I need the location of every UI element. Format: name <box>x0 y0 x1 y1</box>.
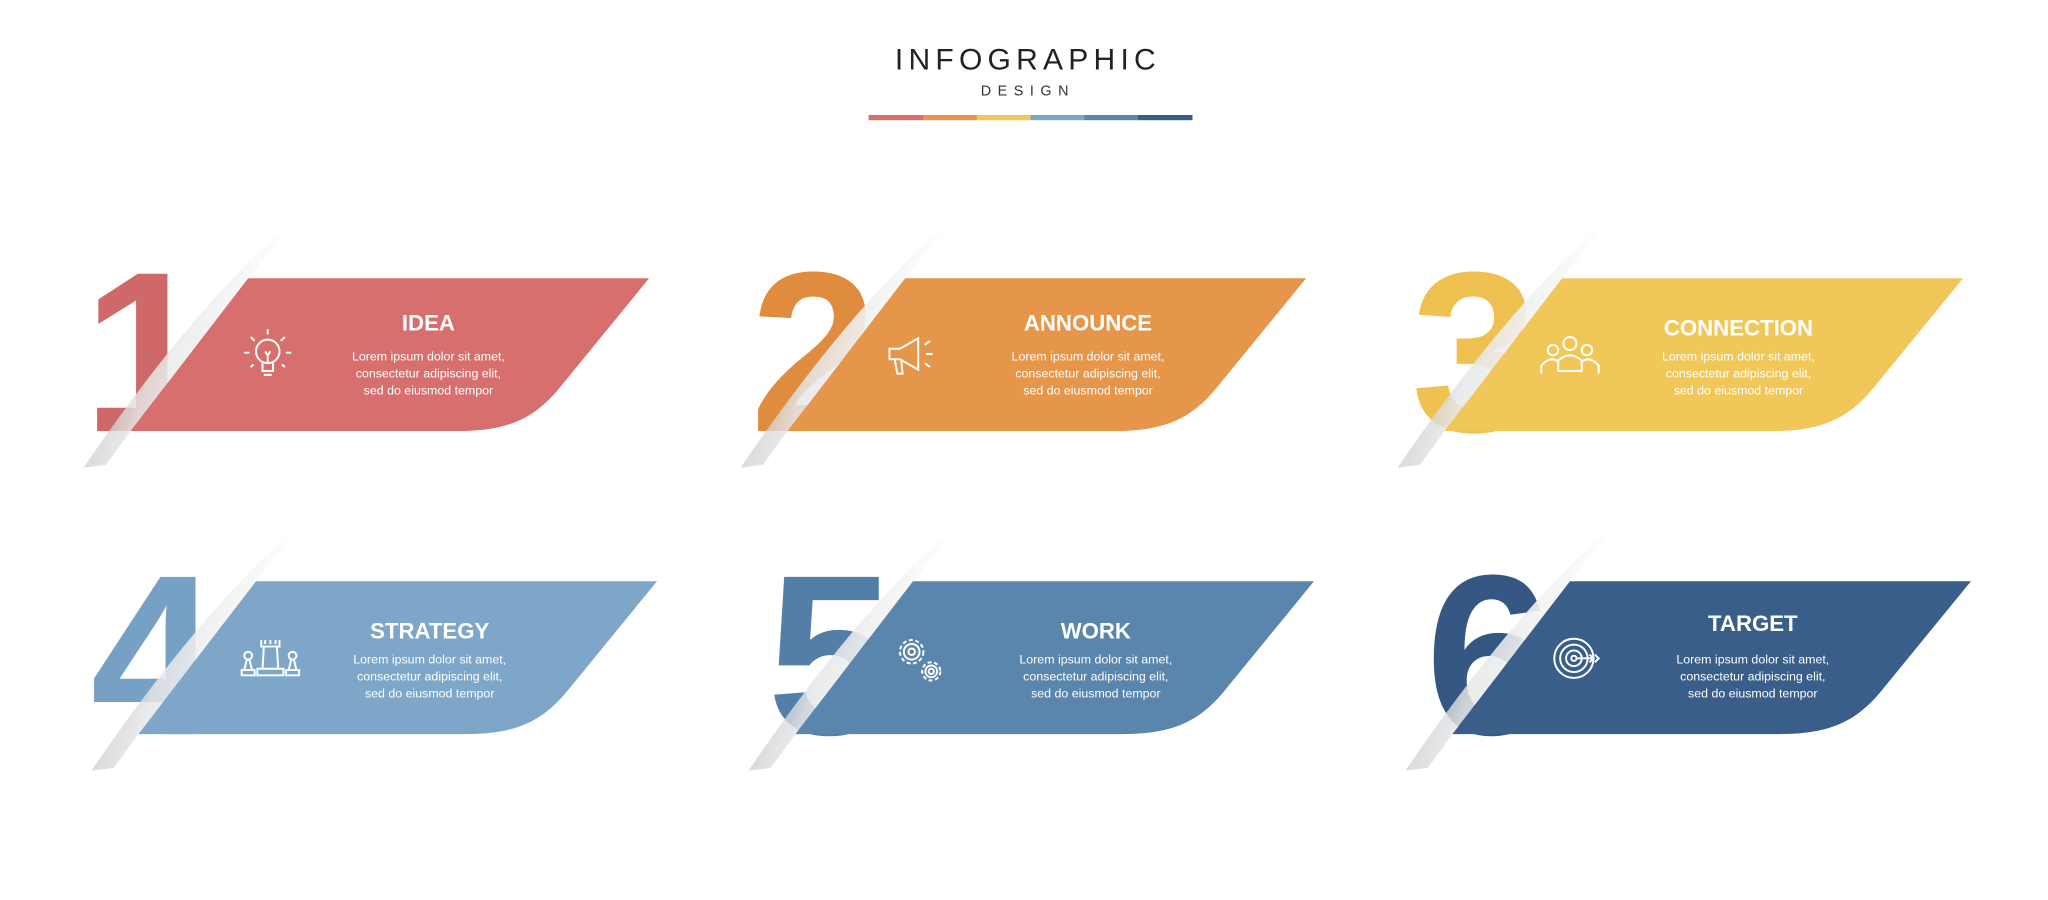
text <box>1012 310 1164 397</box>
color bar <box>869 115 1192 120</box>
text <box>1676 611 1829 701</box>
text: sed do eiusmod tempor <box>1674 383 1803 397</box>
text: WORK <box>1061 619 1131 644</box>
text: STRATEGY <box>370 619 489 644</box>
text: Lorem ipsum dolor sit amet, <box>1012 350 1164 364</box>
panel 6: target <box>1405 512 1971 783</box>
text <box>1019 619 1172 701</box>
band <box>795 581 1314 734</box>
band <box>1452 581 1971 734</box>
text: Lorem ipsum dolor sit amet, <box>1676 653 1829 667</box>
text: consectetur adipiscing elit, <box>357 670 502 684</box>
number 2: 2 <box>750 225 877 480</box>
title: INFOGRAPHIC <box>895 43 1161 76</box>
icon: target <box>1554 639 1599 678</box>
text: ANNOUNCE <box>1024 310 1152 335</box>
number 1: 1 <box>83 225 210 480</box>
text: consectetur adipiscing elit, <box>356 367 501 381</box>
icon: people <box>1541 337 1599 374</box>
band <box>1445 278 1963 431</box>
panel 2: announce <box>741 209 1306 480</box>
text: Lorem ipsum dolor sit amet, <box>353 653 506 667</box>
text: CONNECTION <box>1664 316 1813 341</box>
text: sed do eiusmod tempor <box>364 383 493 397</box>
text: sed do eiusmod tempor <box>1688 687 1818 701</box>
icon: chess <box>242 640 299 675</box>
text: Lorem ipsum dolor sit amet, <box>352 350 505 364</box>
text <box>353 619 506 701</box>
number 4: 4 <box>91 528 218 783</box>
band <box>131 278 649 431</box>
text: sed do eiusmod tempor <box>1031 687 1161 701</box>
number 6: 6 <box>1425 528 1553 783</box>
band <box>788 278 1306 431</box>
band <box>138 581 657 734</box>
text: Lorem ipsum dolor sit amet, <box>1662 350 1815 364</box>
icon: megaphone <box>889 338 933 374</box>
text: IDEA <box>402 310 455 335</box>
panel 3: connection <box>1398 209 1963 480</box>
number 3: 3 <box>1411 225 1538 480</box>
text <box>1662 316 1815 397</box>
text: consectetur adipiscing elit, <box>1680 670 1825 684</box>
text <box>352 310 505 397</box>
text: TARGET <box>1708 611 1798 636</box>
title: DESIGN <box>981 83 1075 99</box>
icon: light bulb <box>244 329 291 375</box>
title <box>895 43 1161 99</box>
text: Lorem ipsum dolor sit amet, <box>1019 653 1172 667</box>
text: sed do eiusmod tempor <box>1023 383 1153 397</box>
panel 5: work <box>748 512 1314 783</box>
panel 1: idea <box>83 209 649 480</box>
number 5: 5 <box>767 528 894 783</box>
text: consectetur adipiscing elit, <box>1666 367 1811 381</box>
panel 4: strategy <box>91 512 657 783</box>
text: consectetur adipiscing elit, <box>1023 670 1169 684</box>
text: sed do eiusmod tempor <box>365 687 494 701</box>
text: consectetur adipiscing elit, <box>1015 367 1161 381</box>
icon: gears <box>900 640 940 681</box>
